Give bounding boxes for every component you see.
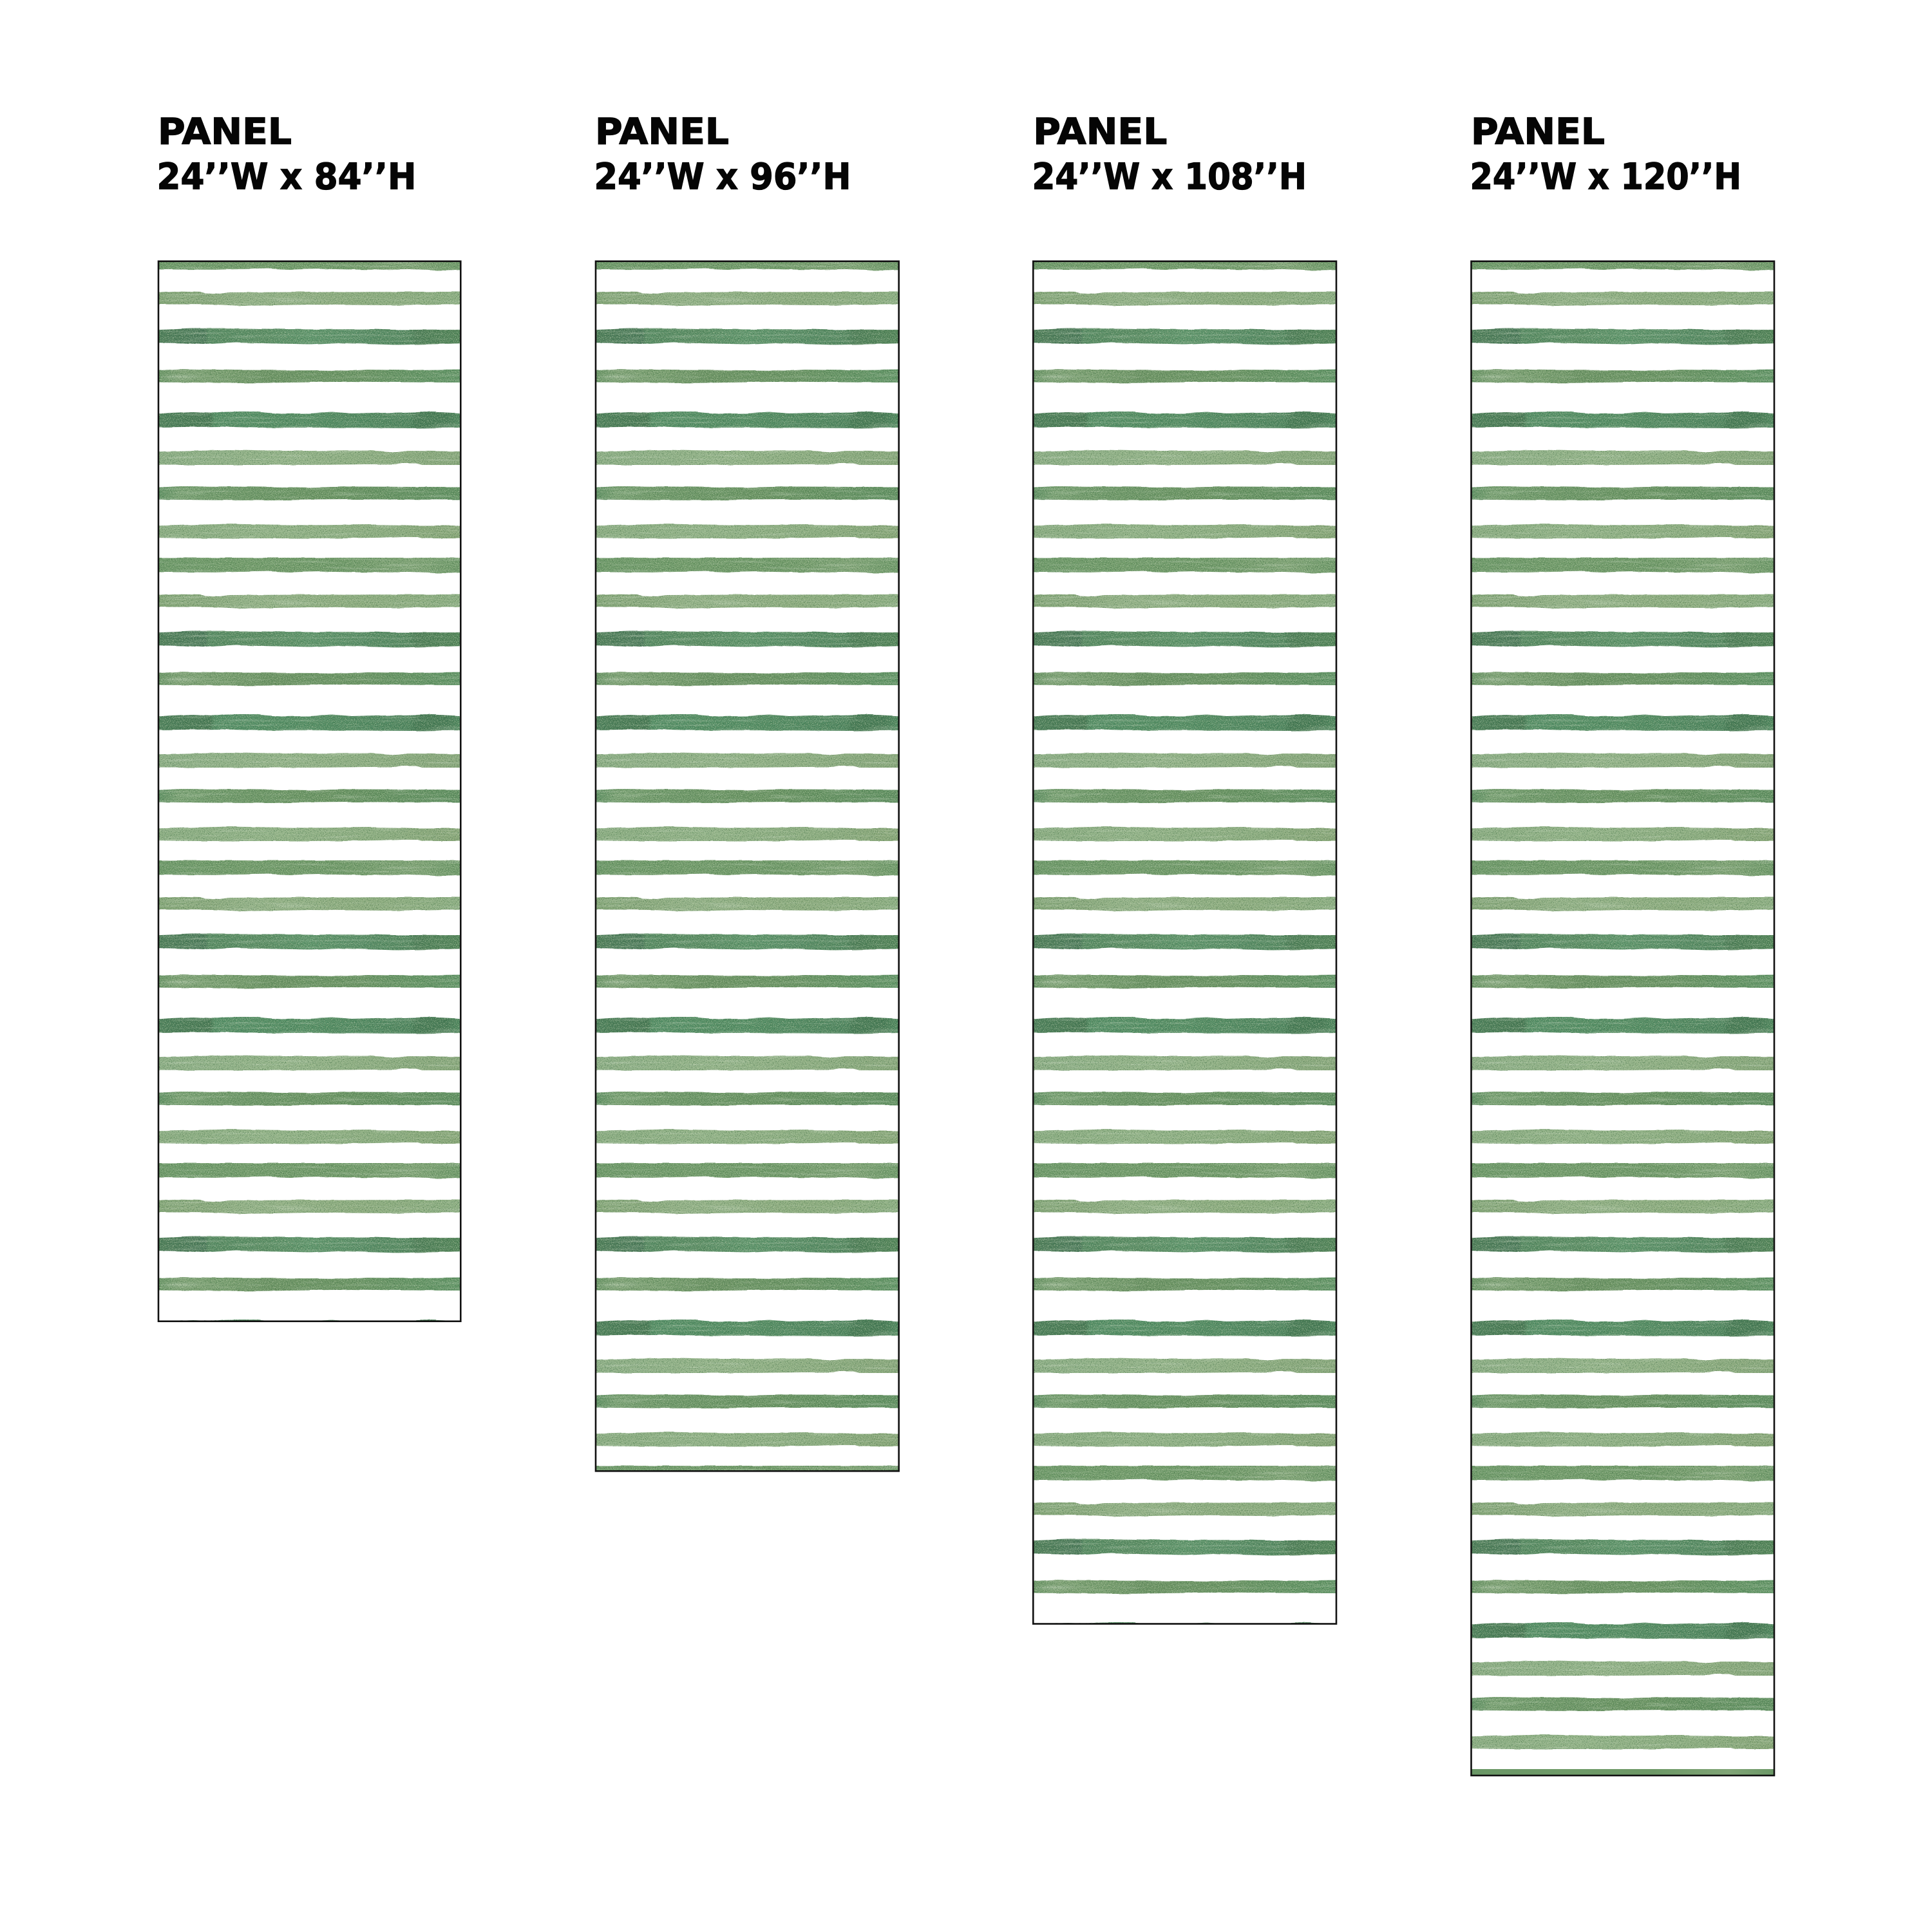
- heading: panel 24 x 120: [1470, 111, 1741, 198]
- heading: panel 24 x 84: [157, 111, 416, 198]
- heading: panel 24 x 84: PANEL: [158, 111, 292, 153]
- heading: panel 24 x 120: 24’’W x 120’’H: [1470, 156, 1741, 198]
- striped wallpaper: 108 inch: [1034, 262, 1336, 1623]
- frame: 96 inch panel: [596, 261, 899, 1471]
- frame: 108 inch panel: [1033, 261, 1336, 1624]
- heading: panel 24 x 108: 24’’W x 108’’H: [1032, 156, 1307, 198]
- panel: 24 x 108: [1029, 111, 1340, 1748]
- heading: panel 24 x 108: PANEL: [1033, 111, 1167, 153]
- striped wallpaper: 96 inch: [596, 262, 898, 1470]
- heading: panel 24 x 96: PANEL: [595, 111, 729, 153]
- heading: panel 24 x 120: PANEL: [1471, 111, 1605, 153]
- heading: panel 24 x 108: [1032, 111, 1307, 198]
- striped wallpaper: 120 inch: [1468, 256, 1778, 1776]
- striped wallpaper: 84 inch: [159, 262, 460, 1320]
- frame: 84 inch panel: [158, 261, 460, 1321]
- panel: 24 x 96: [595, 117, 900, 1472]
- heading: panel 24 x 84: 24’’W x 84’’H: [157, 156, 416, 198]
- heading: panel 24 x 96: 24’’W x 96’’H: [594, 156, 851, 198]
- frame: 120 inch panel: [1471, 261, 1774, 1776]
- panel: 24 x 120: [1468, 111, 1778, 1776]
- heading: panel 24 x 96: [594, 111, 851, 198]
- panel: 24 x 84: [157, 117, 462, 1322]
